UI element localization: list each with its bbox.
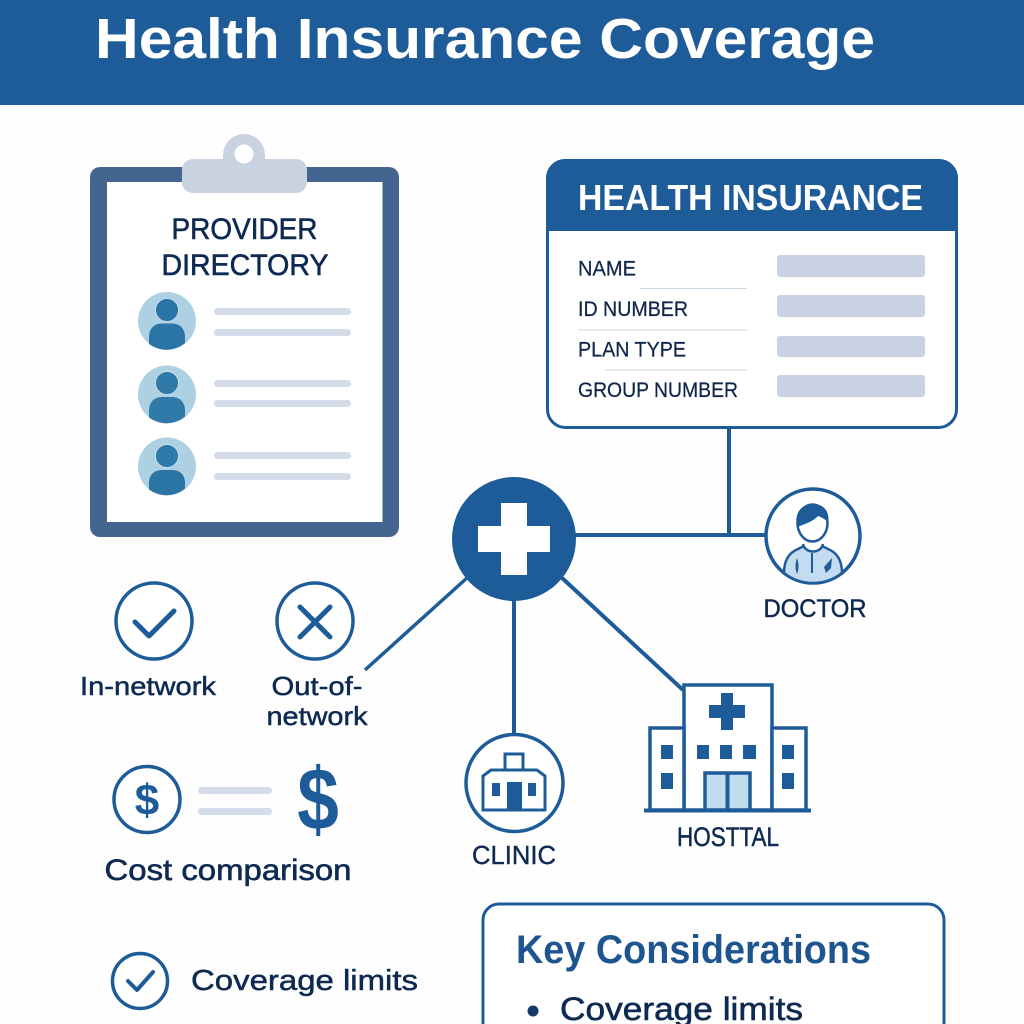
header banner — [0, 0, 1024, 105]
icon: dollar in circle: $ — [135, 776, 159, 825]
cost comparison item — [104, 751, 352, 887]
in-network item: In-network — [80, 671, 217, 701]
out-of-network item: Out-of- — [272, 671, 362, 701]
provider row 1 — [138, 292, 351, 350]
connector lines — [365, 427, 766, 735]
card field: id number — [578, 295, 925, 321]
card field: plan type — [578, 336, 925, 362]
clinic label: CLINIC — [472, 840, 556, 870]
icon: check — [112, 954, 168, 1008]
clipboard clip — [182, 134, 307, 193]
card header: HEALTH INSURANCE — [578, 177, 923, 218]
key considerations heading: Key Considerations — [516, 928, 871, 972]
card field: plan type: PLAN TYPE — [578, 338, 686, 362]
out-of-network item: network — [266, 701, 369, 731]
comparison bars — [198, 787, 272, 815]
provider row 2 — [138, 366, 351, 424]
doctor label: DOCTOR — [764, 595, 866, 623]
icon: doctor — [766, 489, 860, 583]
cost comparison item: Cost comparison — [104, 854, 352, 887]
card field: group number — [578, 375, 925, 402]
out-of-network item — [266, 583, 369, 731]
in-network item — [80, 583, 217, 701]
icon: central medical cross — [452, 477, 576, 601]
panel: health insurance card — [546, 159, 958, 428]
icon: hospital — [644, 685, 811, 810]
card field: group number: GROUP NUMBER — [578, 379, 738, 402]
icon: cross — [277, 583, 353, 659]
directory heading: PROVIDER — [172, 213, 318, 246]
provider row 3 — [138, 438, 351, 496]
card field: name: NAME — [578, 258, 636, 280]
card header — [546, 159, 958, 231]
coverage limits item: Coverage limits — [191, 965, 418, 997]
icon: clinic — [466, 734, 563, 832]
icon: large dollar: $ — [297, 751, 339, 849]
coverage limits item — [112, 954, 418, 1008]
hospital label: HOSTTAL — [677, 822, 779, 852]
card field: name — [578, 255, 925, 280]
panel: provider directory clipboard — [90, 134, 399, 537]
icon: check — [116, 583, 192, 659]
icon: dollar in circle — [114, 766, 180, 832]
card field: id number: ID NUMBER — [578, 298, 688, 321]
title: Health Insurance Coverage — [95, 7, 875, 71]
panel: key considerations — [483, 904, 944, 1024]
panel: provider directory clipboard: DIRECTORY — [162, 249, 328, 282]
